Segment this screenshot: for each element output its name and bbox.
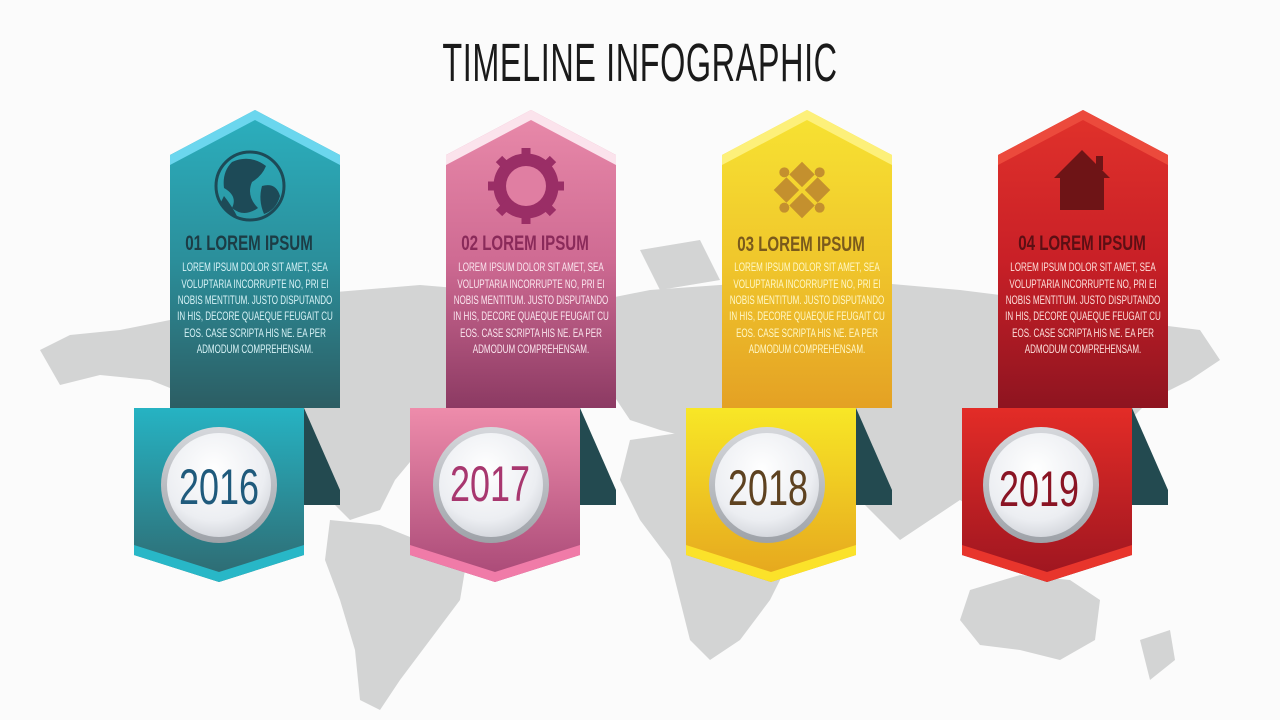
icon: gear bbox=[488, 148, 564, 224]
text block: VOLUPTARIA INCORRUPTE NO, PRI EI bbox=[733, 279, 881, 291]
text block: IN HIS, DECORE QUAEQUE FEUGAIT CU bbox=[729, 311, 885, 323]
heading: 04 LOREM IPSUM bbox=[1018, 230, 1146, 255]
heading: 03 LOREM IPSUM bbox=[737, 231, 865, 256]
text block: NOBIS MENTITUM. JUSTO DISPUTANDO bbox=[454, 295, 609, 307]
year tag bbox=[134, 408, 304, 582]
text block: IN HIS, DECORE QUAEQUE FEUGAIT CU bbox=[177, 311, 333, 323]
year tag bbox=[962, 408, 1132, 582]
text block: EOS. CASE SCRIPTA HIS NE. EA PER bbox=[460, 328, 602, 340]
text block bbox=[729, 262, 885, 356]
panel: 2016 bbox=[134, 110, 340, 582]
panel: 2019 bbox=[962, 110, 1168, 582]
heading: 02 LOREM IPSUM bbox=[461, 230, 589, 255]
world map bbox=[40, 240, 1220, 710]
text block: NOBIS MENTITUM. JUSTO DISPUTANDO bbox=[1006, 295, 1161, 307]
text block bbox=[1005, 262, 1161, 356]
text block: ADMODUM COMPREHENSAM. bbox=[473, 344, 589, 356]
text block: ADMODUM COMPREHENSAM. bbox=[749, 344, 865, 356]
text block: LOREM IPSUM DOLOR SIT AMET, SEA bbox=[734, 262, 880, 274]
text block: LOREM IPSUM DOLOR SIT AMET, SEA bbox=[182, 262, 328, 274]
year tag: 2018 bbox=[728, 461, 808, 516]
text block: EOS. CASE SCRIPTA HIS NE. EA PER bbox=[736, 328, 878, 340]
text block bbox=[453, 262, 609, 356]
year tag bbox=[410, 408, 580, 582]
year tag: 2016 bbox=[179, 460, 259, 515]
panel: 2018 bbox=[686, 110, 892, 582]
text block: VOLUPTARIA INCORRUPTE NO, PRI EI bbox=[457, 279, 605, 291]
text block: VOLUPTARIA INCORRUPTE NO, PRI EI bbox=[1009, 279, 1157, 291]
text block: ADMODUM COMPREHENSAM. bbox=[197, 344, 313, 356]
icon: puzzle bbox=[760, 148, 844, 232]
text block: LOREM IPSUM DOLOR SIT AMET, SEA bbox=[458, 262, 604, 274]
heading: 01 LOREM IPSUM bbox=[185, 230, 313, 255]
icon: house bbox=[1054, 150, 1110, 210]
icon: globe bbox=[216, 152, 284, 220]
year tag: 2019 bbox=[999, 462, 1079, 517]
year tag bbox=[686, 408, 856, 582]
text block: EOS. CASE SCRIPTA HIS NE. EA PER bbox=[184, 328, 326, 340]
text block: NOBIS MENTITUM. JUSTO DISPUTANDO bbox=[178, 295, 333, 307]
text block bbox=[177, 262, 333, 356]
text block: IN HIS, DECORE QUAEQUE FEUGAIT CU bbox=[453, 311, 609, 323]
year tag: 2017 bbox=[450, 457, 530, 512]
text block: ADMODUM COMPREHENSAM. bbox=[1025, 344, 1141, 356]
text block: EOS. CASE SCRIPTA HIS NE. EA PER bbox=[1012, 328, 1154, 340]
text block: NOBIS MENTITUM. JUSTO DISPUTANDO bbox=[730, 295, 885, 307]
text block: IN HIS, DECORE QUAEQUE FEUGAIT CU bbox=[1005, 311, 1161, 323]
panel: 2017 bbox=[410, 110, 616, 582]
text block: VOLUPTARIA INCORRUPTE NO, PRI EI bbox=[181, 279, 329, 291]
text block: LOREM IPSUM DOLOR SIT AMET, SEA bbox=[1010, 262, 1156, 274]
title: TIMELINE INFOGRAPHIC bbox=[442, 34, 838, 93]
